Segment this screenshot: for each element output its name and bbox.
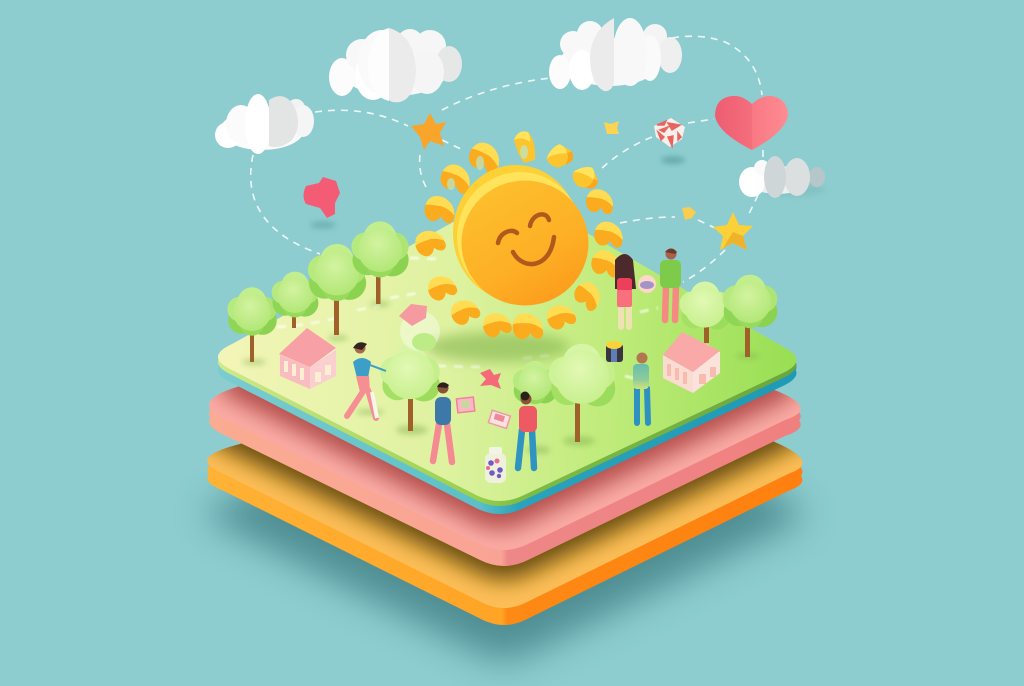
sun rim <box>453 165 579 301</box>
gift: dark box <box>606 341 623 362</box>
person: walking teal <box>347 342 386 418</box>
person: red top <box>518 392 537 468</box>
icon: candy box <box>654 118 685 147</box>
green top layer <box>218 194 796 514</box>
tree shadows <box>242 301 760 454</box>
stacked layers <box>207 194 802 625</box>
dashed flight paths <box>251 36 763 282</box>
icon: tiny star <box>682 207 696 220</box>
icon: orange star <box>411 113 446 150</box>
cloud: far left <box>215 94 314 154</box>
sun smile <box>498 214 554 264</box>
icon: smiling sun <box>413 131 628 343</box>
candy jar <box>485 447 506 483</box>
pink layer <box>209 386 801 566</box>
person: teal shirt, right <box>633 352 649 423</box>
house: left <box>279 328 336 389</box>
shadow under candy <box>661 156 685 164</box>
gift: card <box>488 410 510 428</box>
cloud: top centre-left <box>329 28 462 102</box>
ground shadow <box>207 366 802 660</box>
sun rays <box>413 131 628 343</box>
cloud: top centre-right <box>549 18 682 91</box>
person: blue top <box>433 382 452 462</box>
house: right <box>663 332 720 393</box>
icon: heart <box>715 96 788 150</box>
icon: pink star on ground <box>480 369 501 389</box>
sun shadow on ground <box>426 332 570 362</box>
trees <box>227 221 777 442</box>
sun face <box>462 180 588 306</box>
small house in bubble <box>399 304 440 351</box>
icon: gold star <box>713 212 753 250</box>
icon: small yellow star <box>604 121 619 134</box>
dashed paths on the ground <box>277 258 658 380</box>
orange layer <box>207 442 802 625</box>
gift: pink box <box>456 397 475 413</box>
person: long hair, pink top <box>615 254 636 327</box>
shadow under splash <box>310 222 336 228</box>
top tall ray <box>514 131 535 163</box>
person: green shirt, top right <box>660 248 681 320</box>
cloud: right <box>739 156 825 198</box>
holes in rays <box>447 145 528 190</box>
icon: pink splash <box>304 177 340 218</box>
gift: ball held by girl <box>638 275 656 293</box>
